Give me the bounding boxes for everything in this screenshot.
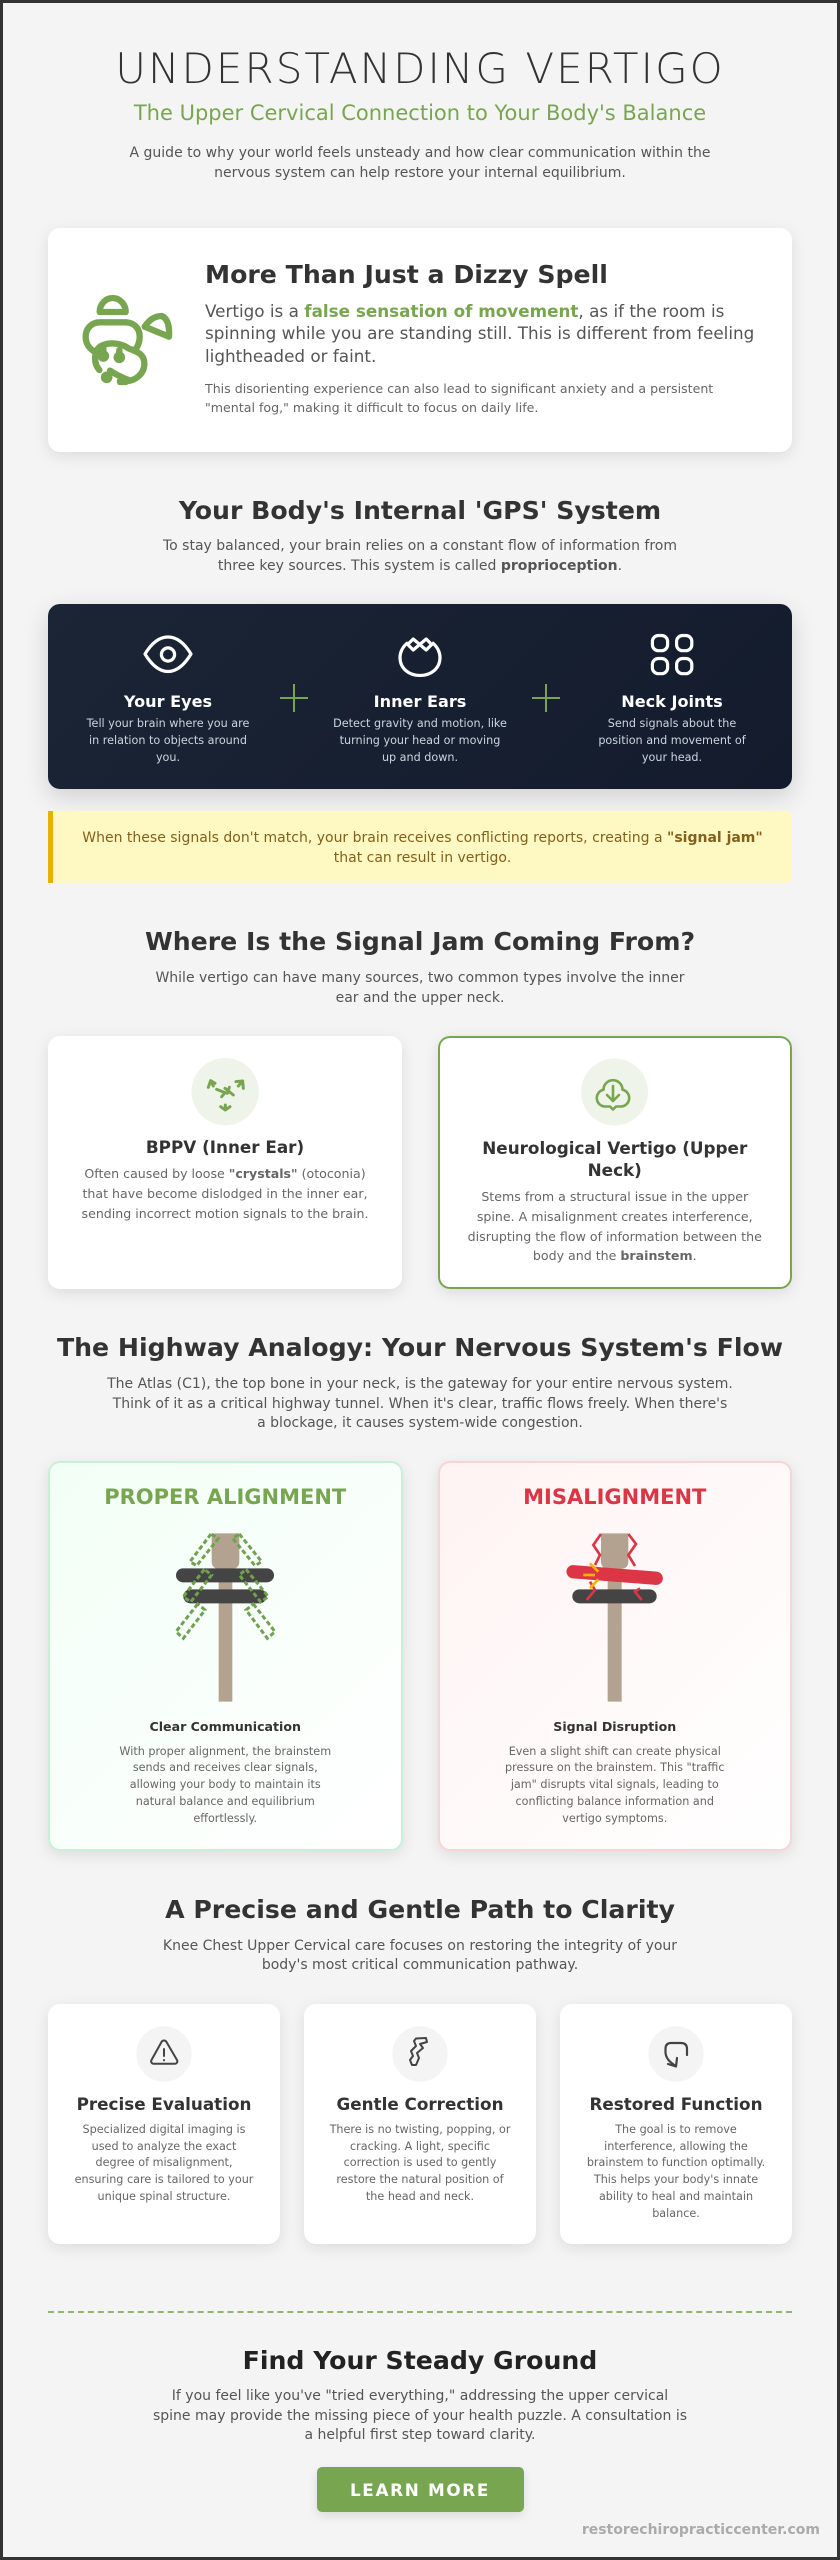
closing text: a helpful first step toward clarity.	[305, 2427, 535, 2443]
card text: This helps your body's innate	[594, 2173, 758, 2186]
description: up and down.	[382, 751, 458, 764]
card title: Neurological Vertigo (Upper	[482, 1138, 747, 1158]
source: eyes	[86, 635, 249, 764]
heading: More Than Just a Dizzy Spell	[205, 260, 608, 288]
card title: Restored Function	[589, 2094, 763, 2114]
description: Detect gravity and motion, like	[333, 717, 507, 730]
website address: restorechiropracticcenter.com	[582, 2522, 820, 2538]
source: inner ears	[333, 637, 507, 764]
description: your head.	[642, 751, 702, 764]
panel: three sources	[48, 604, 792, 788]
description: in relation to objects around	[89, 734, 247, 747]
card text: ensuring care is tailored to your	[75, 2173, 253, 2186]
card title	[482, 1138, 748, 1180]
title: UNDERSTANDING VERTIGO	[115, 44, 725, 92]
diagram text: Even a slight shift can create physical	[509, 1745, 721, 1758]
button label: LEARN MORE	[350, 2480, 490, 2500]
definition text: lightheaded or faint.	[205, 346, 376, 366]
plus sign	[280, 684, 308, 712]
icon: brainstem	[581, 1058, 648, 1126]
panel heading: PROPER ALIGNMENT	[104, 1485, 346, 1509]
card text: sending incorrect motion signals to the brain.	[82, 1206, 368, 1221]
diagram: misaligned spine with signal disruption	[566, 1533, 663, 1702]
card text: Specialized digital imaging is	[83, 2123, 245, 2136]
heading: precise and gentle path: A Precise and Gentle Path to Clarity	[165, 1895, 675, 1924]
signal jam intro text: While vertigo can have many sources, two common types involve the inner	[155, 970, 685, 986]
heading: GPS system: Your Body's Internal 'GPS' System	[179, 496, 661, 525]
card text: body and the brainstem.	[533, 1248, 697, 1263]
diagram: aligned spine with clear signals	[176, 1533, 276, 1702]
description	[598, 717, 746, 764]
intro text: A guide to why your world feels unsteady and how clear communication within the	[130, 145, 710, 161]
panel: BPPV	[48, 1036, 402, 1289]
definition text: spinning while you are standing still. This is different from feeling	[205, 323, 754, 343]
description: position and movement of	[598, 734, 746, 747]
closing text: spine may provide the missing piece of your health puzzle. A consultation is	[153, 2408, 687, 2424]
path intro text: Knee Chest Upper Cervical care focuses on restoring the integrity of your	[163, 1938, 677, 1954]
definition text	[205, 301, 754, 366]
card title: Neck)	[588, 1160, 642, 1180]
heading: find your steady ground: Find Your Steady Ground	[243, 2346, 597, 2374]
card text: cracking. A light, specific	[350, 2140, 490, 2153]
icon: spine squiggle	[392, 2026, 448, 2082]
source: neck joints	[598, 634, 746, 764]
icon: return arrow	[648, 2026, 704, 2082]
icon: neck joints	[650, 634, 694, 676]
definition text: Vertigo is a false sensation of movement, as if the room is	[205, 301, 724, 321]
card title: Precise Evaluation	[77, 2094, 251, 2114]
label: Your Eyes	[124, 692, 212, 711]
diagram title: Signal Disruption	[553, 1719, 676, 1734]
card text: There is no twisting, popping, or	[330, 2123, 510, 2136]
highway intro text: a blockage, it causes system-wide congestion.	[257, 1415, 583, 1431]
label: Inner Ears	[374, 692, 466, 711]
description	[333, 717, 507, 764]
diagram text: pressure on the brainstem. This "traffic	[505, 1761, 725, 1774]
diagram text: allowing your body to maintain its	[130, 1778, 321, 1791]
card text: that have become dislodged in the inner ear,	[82, 1186, 368, 1201]
description: Tell your brain where you are	[87, 717, 249, 730]
icon: warning triangle	[136, 2026, 192, 2082]
diagram text: conflicting balance information and	[516, 1795, 714, 1808]
GPS intro text: three key sources. This system is called proprioception.	[218, 558, 622, 574]
callout text	[82, 830, 763, 866]
panel heading: MISALIGNMENT	[523, 1485, 706, 1509]
diagram text	[119, 1745, 331, 1825]
path intro text: body's most critical communication pathway.	[262, 1957, 578, 1973]
description: Send signals about the	[608, 717, 736, 730]
highway intro text: Think of it as a critical highway tunnel. When it's clear, traffic flows freely. When there's	[113, 1396, 727, 1412]
signal jam intro text: ear and the upper neck.	[336, 990, 504, 1006]
diagram text	[505, 1745, 725, 1825]
card text: used to analyze the exact	[92, 2140, 236, 2153]
panel: misalignment	[438, 1461, 792, 1851]
diagram text: jam" disrupts vital signals, leading to	[511, 1778, 719, 1791]
plus sign	[532, 684, 560, 712]
card text: Stems from a structural issue in the upper	[481, 1189, 748, 1204]
card text: balance.	[652, 2207, 700, 2220]
card text: restore the natural position of	[336, 2173, 504, 2186]
panel: neurological vertigo	[438, 1036, 792, 1289]
signal jam intro text	[155, 970, 685, 1006]
closing text: If you feel like you've "tried everything," addressing the upper cervical	[172, 2388, 668, 2404]
diagram text: sends and receives clear signals,	[133, 1761, 318, 1774]
highway intro text	[107, 1376, 733, 1431]
panel: gentle correction	[304, 2004, 536, 2244]
card text: brainstem to function optimally.	[587, 2156, 765, 2169]
icon: inner ear	[398, 637, 442, 678]
card text	[330, 2123, 510, 2203]
intro text	[130, 145, 710, 181]
callout text: When these signals don't match, your brain receives conflicting reports, creating a "signal jam"	[82, 830, 763, 846]
GPS intro text	[162, 538, 677, 574]
button: learn more	[316, 2467, 524, 2512]
card title: Gentle Correction	[336, 2094, 504, 2114]
callout text: that can result in vertigo.	[334, 850, 511, 866]
panel: restored function	[560, 2004, 792, 2244]
subtitle: The Upper Cervical Connection to Your Body's Balance	[134, 101, 706, 125]
card text: degree of misalignment,	[95, 2156, 232, 2169]
heading: signal jam source: Where Is the Signal Jam Coming From?	[145, 927, 695, 956]
panel: more than just a dizzy spell	[48, 228, 792, 452]
heading: highway analogy: The Highway Analogy: Your Nervous System's Flow	[57, 1333, 783, 1362]
card text: Often caused by loose "crystals" (otoconia)	[84, 1166, 366, 1181]
card text: spine. A misalignment creates interference,	[477, 1209, 753, 1224]
card text	[587, 2123, 765, 2220]
diagram text: vertigo symptoms.	[562, 1812, 667, 1825]
note text: "mental fog," making it difficult to focus on daily life.	[205, 400, 538, 415]
icon: dizzy head	[82, 294, 172, 386]
description	[86, 717, 249, 764]
diagram title: Clear Communication	[149, 1719, 301, 1734]
card text	[468, 1189, 762, 1263]
label: Neck Joints	[621, 692, 723, 711]
card text	[82, 1166, 368, 1221]
GPS intro text: To stay balanced, your brain relies on a constant flow of information from	[163, 538, 677, 554]
intro text: nervous system can help restore your internal equilibrium.	[214, 165, 626, 181]
card text: interference, allowing the	[604, 2140, 748, 2153]
icon: loose crystals	[192, 1058, 259, 1126]
path intro text	[163, 1938, 677, 1973]
card text: correction is used to gently	[344, 2156, 496, 2169]
note text: This disorienting experience can also lead to significant anxiety and a persistent	[205, 381, 713, 396]
card text	[75, 2123, 254, 2203]
note text	[204, 381, 713, 415]
icon: eye	[143, 635, 193, 674]
card text: disrupting the flow of information between the	[468, 1229, 762, 1244]
diagram text: effortlessly.	[193, 1812, 257, 1825]
callout: signal jam	[48, 811, 792, 883]
panel: precise evaluation	[48, 2004, 280, 2244]
description: you.	[156, 751, 180, 764]
diagram text: With proper alignment, the brainstem	[119, 1745, 331, 1758]
diagram text: natural balance and equilibrium	[136, 1795, 315, 1808]
card text: ability to heal and maintain	[599, 2190, 753, 2203]
panel: proper alignment	[48, 1461, 402, 1851]
description: turning your head or moving	[340, 734, 500, 747]
highway intro text: The Atlas (C1), the top bone in your neck, is the gateway for your entire nervous system.	[107, 1376, 733, 1392]
card title: BPPV (Inner Ear)	[146, 1137, 304, 1157]
closing text	[153, 2388, 687, 2443]
card text: unique spinal structure.	[98, 2190, 230, 2203]
card text: the head and neck.	[366, 2190, 474, 2203]
card text: The goal is to remove	[615, 2123, 737, 2136]
